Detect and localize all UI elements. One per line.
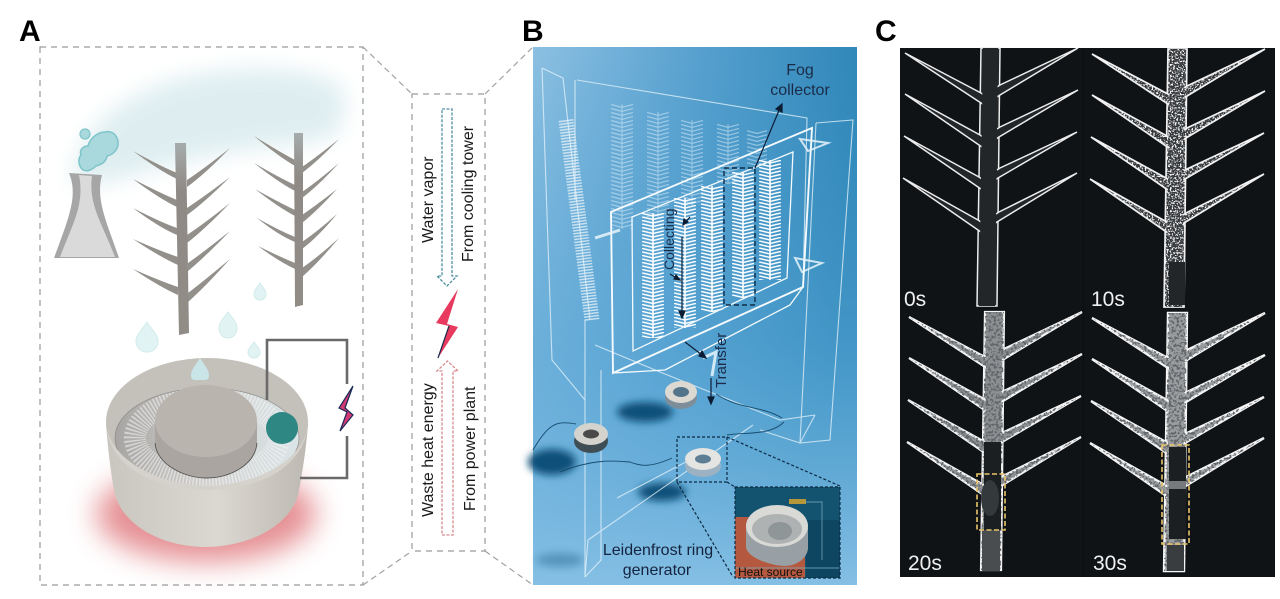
falling droplet: [191, 358, 209, 380]
icon: cooling tower: [54, 173, 119, 258]
teal droplet sphere: [266, 412, 298, 444]
label: collecting: Collecting: [661, 209, 677, 270]
dashed zoom box and leaders: [677, 437, 840, 577]
panel C: time-lapse photos: [900, 48, 1275, 577]
collector tree right: [254, 133, 339, 307]
thin wires: [533, 394, 784, 472]
red dashed arrow: [437, 361, 458, 535]
label 30s: 30s: [1093, 552, 1127, 575]
label 0s: 0s: [904, 288, 926, 311]
panel A: fog harvesting schematic: [40, 47, 363, 585]
panel A dashed frame: [40, 47, 363, 585]
time-lapse frame: 10s: [1090, 49, 1265, 311]
inset photo: ring on heat source: [735, 487, 840, 579]
dark photo background: [900, 48, 1275, 577]
ring generator, rear: [665, 381, 697, 409]
Leidenfrost ring generator illustration: [106, 358, 308, 547]
label: transfer: Transfer: [713, 333, 730, 388]
zoom connector lines: [363, 47, 533, 585]
radial fins: [135, 398, 279, 478]
panel B: photo of device: [528, 47, 857, 585]
yellow dashed droplet box 20s: [977, 474, 1005, 530]
label: from power plant: From power plant: [462, 386, 479, 511]
time-lapse frame: 30s: [1090, 313, 1265, 575]
ring outer wall: [106, 425, 308, 547]
circuit wires: [267, 340, 347, 478]
photo background: [533, 47, 857, 585]
side view comb: [566, 120, 592, 320]
label: from cooling tower: From cooling tower: [460, 125, 477, 262]
fog collector dashed highlight: [724, 168, 755, 305]
arrows: transfer: [685, 342, 714, 404]
inset label: heat source: Heat source: [738, 565, 803, 579]
icon: small lightning bolt: [339, 386, 353, 431]
panel label C: C: [875, 15, 897, 48]
arrows: collecting: [670, 217, 690, 318]
acrylic clips: [595, 139, 828, 376]
label 10s: 10s: [1091, 288, 1125, 311]
label 20s: 20s: [908, 552, 942, 575]
time-lapse frame: 0s: [903, 48, 1078, 311]
label: waste heat energy: Waste heat energy: [420, 383, 437, 517]
panel label B: B: [522, 15, 544, 48]
yellow dashed droplet box 30s: [1162, 445, 1189, 544]
central cylinder: [155, 421, 257, 478]
ring inner floor: [115, 388, 299, 488]
blue dashed arrow: [437, 109, 457, 286]
icon: steam cloud: [79, 129, 118, 171]
back fog collector combs: [611, 104, 767, 229]
front fog collector combs: [642, 160, 781, 338]
label: water vapor: Water vapor: [420, 156, 437, 243]
ring rim: [106, 358, 308, 486]
collector tree left: [133, 143, 230, 335]
arrow: fog collector leader: [755, 104, 782, 168]
icon: large lightning bolt: [436, 289, 458, 358]
ring generator, left: [574, 423, 608, 453]
label: Leidenfrost ring generator: Leidenfrost ring: [603, 542, 713, 559]
middle energy panel: [412, 94, 485, 551]
table shadows: [528, 402, 686, 567]
red heat glow: [96, 466, 316, 562]
rim front mask: [106, 425, 308, 490]
ring generator, front: [685, 448, 721, 477]
label: fog collector: collector: [770, 82, 830, 99]
panel label A: A: [19, 15, 41, 48]
water droplets: [136, 283, 266, 358]
middle panel dashed frame: [412, 94, 485, 551]
cylinder top: [155, 385, 257, 457]
acrylic frame outlines: [542, 68, 853, 577]
label: Leidenfrost ring generator: generator: [623, 562, 692, 579]
label: fog collector: Fog: [786, 62, 814, 79]
time-lapse frame: 20s: [907, 312, 1082, 575]
front collector plate: [611, 128, 812, 373]
water vapor plume: [74, 69, 344, 185]
